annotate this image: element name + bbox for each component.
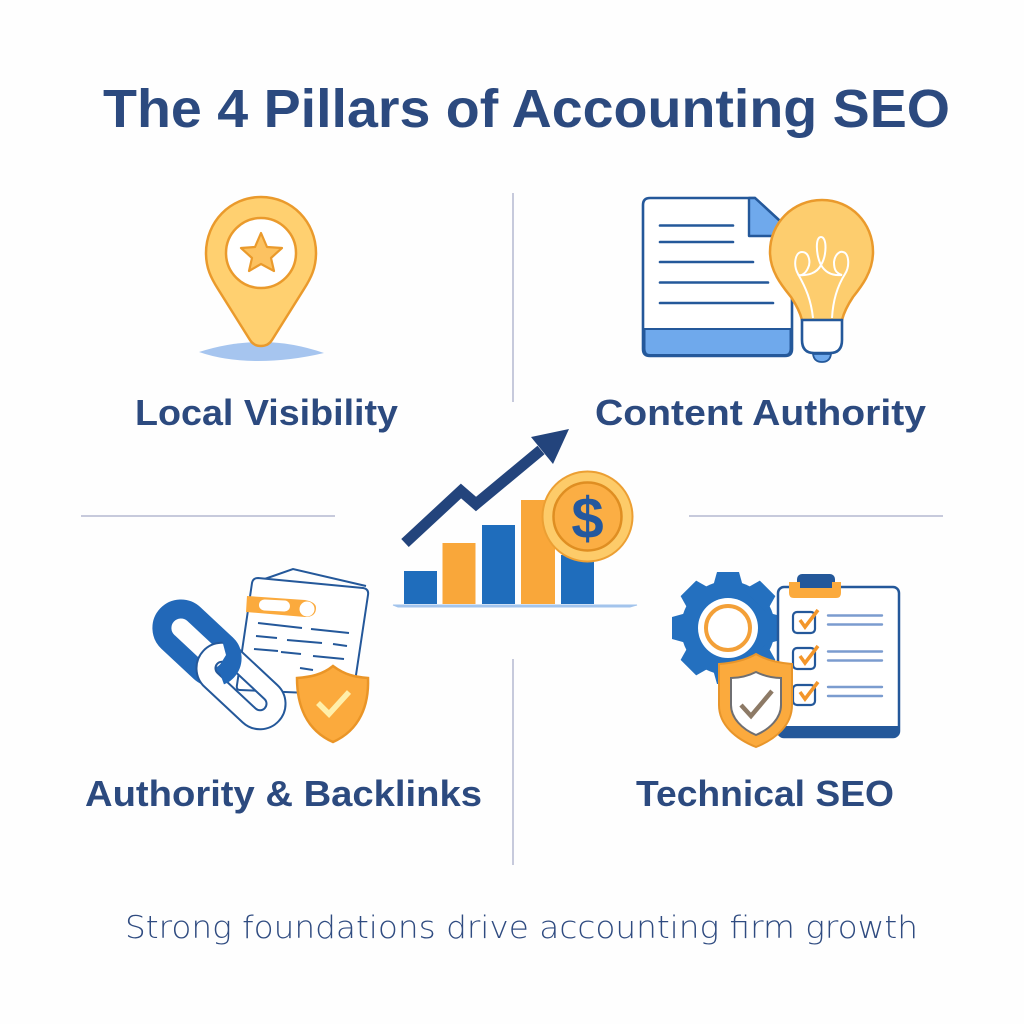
label: local visibility: Local Visibility [135, 392, 398, 433]
icon: chain links, document and shield [154, 569, 368, 742]
panel: technical seo [636, 572, 899, 814]
panel: authority and backlinks [85, 569, 482, 814]
label: content authority: Content Authority [595, 392, 926, 433]
panel: local visibility [135, 197, 398, 433]
icon: dollar coin: $ [571, 486, 604, 551]
icon: gear, checklist and shield [672, 572, 899, 747]
arrow: growth trend [405, 429, 569, 543]
label: technical seo: Technical SEO [636, 773, 894, 814]
chart: growth bars with arrow and coin [393, 429, 637, 607]
icon: dollar coin [542, 472, 632, 562]
footer tagline: Strong foundations drive accounting firm growth [125, 910, 918, 946]
icon: document with light bulb [643, 198, 873, 362]
icon: map pin with star [199, 197, 324, 361]
title: The 4 Pillars of Accounting SEO [103, 79, 950, 139]
label: authority and backlinks: Authority & Backlinks [85, 773, 482, 814]
panel: content authority [595, 198, 926, 433]
